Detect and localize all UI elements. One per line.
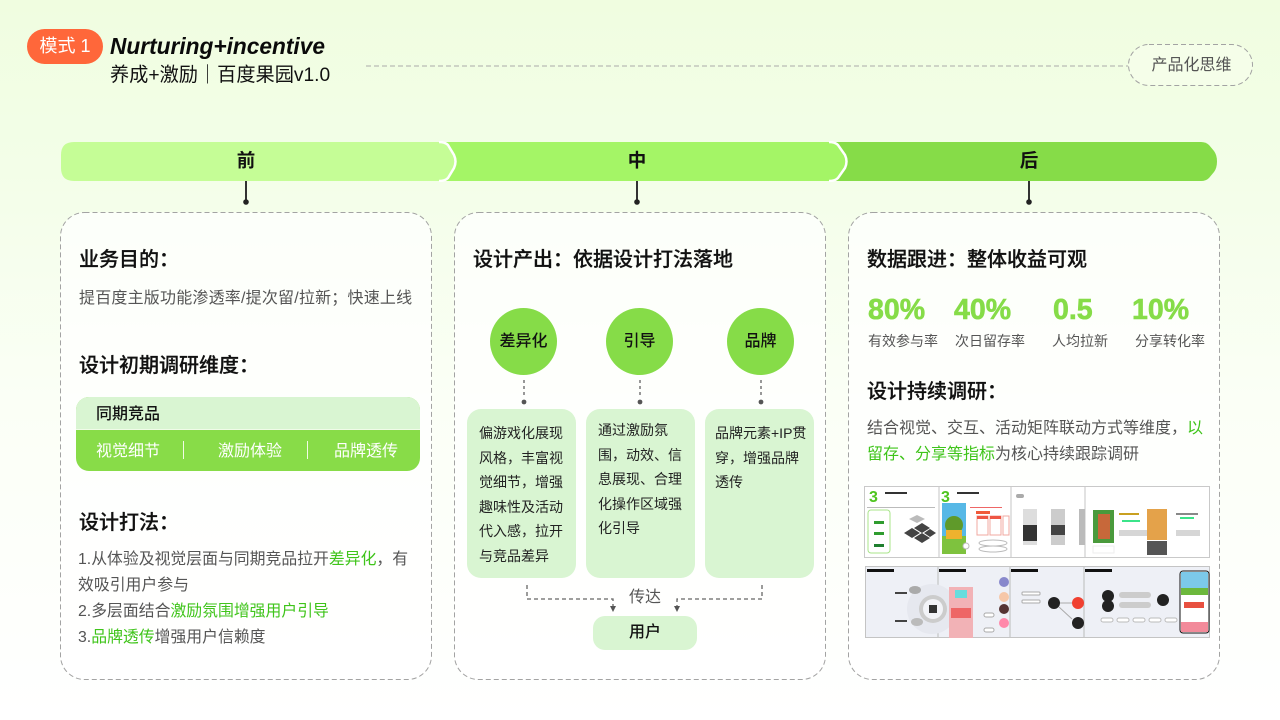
- card: differentiation: 与竞品差异: [479, 548, 549, 564]
- thumbnails: research slides row 1: 3: [941, 489, 950, 506]
- table: competitor dimensions: [76, 397, 420, 471]
- circle: differentiation: 差异化: [499, 333, 548, 350]
- card: brand: 品牌元素+IP贯: [715, 425, 806, 441]
- thumbnails: research slides row 1: [864, 486, 1210, 558]
- card: differentiation: 代入感，拉开: [479, 523, 563, 539]
- card: brand: 穿，增强品牌: [715, 450, 799, 466]
- arrow: after: 后: [1020, 150, 1038, 171]
- stat label: retention: 次日留存率: [955, 333, 1025, 349]
- arrow: before: [61, 142, 456, 181]
- arrow: after: [820, 142, 1217, 181]
- circle: brand: [727, 308, 794, 375]
- panel: after: [848, 212, 1220, 680]
- text: design method list: 3.品牌透传增强用户信赖度: [78, 629, 266, 646]
- table header: [76, 397, 420, 430]
- text: continuous research: 留存、分享等指标为核心持续跟踪调研: [867, 446, 1139, 463]
- card: brand: 透传: [715, 474, 743, 490]
- arrow: during: 中: [628, 150, 646, 171]
- card: differentiation: [467, 409, 576, 578]
- thumbnails: research slides row 2: [865, 566, 1210, 638]
- thumbnails: research slides row 1: 3: [869, 489, 878, 506]
- heading: design method: 设计打法：: [79, 512, 179, 534]
- card: guidance: 化引导: [598, 520, 640, 536]
- table item 2: 激励体验: [218, 443, 282, 460]
- text: continuous research: 结合视觉、交互、活动矩阵联动方式等维度，以: [867, 420, 1203, 437]
- stat label: invites: 人均拉新: [1052, 333, 1108, 349]
- arrow: during: [430, 142, 846, 181]
- title: Nurturing+incentive: [110, 33, 325, 59]
- box: user: [593, 616, 697, 650]
- stat 10%: 10%: [1132, 294, 1189, 326]
- card: differentiation: 趣味性及活动: [479, 498, 563, 514]
- card: differentiation: 风格，丰富视: [479, 450, 563, 466]
- text: continuous research: [867, 419, 1203, 463]
- card: differentiation: 觉细节，增强: [479, 474, 563, 490]
- circle: differentiation: [490, 308, 557, 375]
- card: guidance: 围，动效、信: [598, 446, 682, 462]
- circle: guidance: [606, 308, 673, 375]
- text: design method list: [78, 550, 408, 646]
- text: design method list: 1.从体验及视觉层面与同期竞品拉开差异化，有: [78, 551, 408, 568]
- timeline arrow band: [61, 141, 1217, 182]
- tag: product thinking: [1128, 44, 1253, 86]
- header: [27, 29, 1253, 86]
- label: convey: 传达: [629, 589, 661, 606]
- card: brand: [705, 409, 814, 578]
- card: guidance: 息展现、合理: [598, 471, 682, 487]
- text: business goal: 提百度主版功能渗透率/提次留/拉新；快速上线: [79, 290, 412, 307]
- stat label: participation: 有效参与率: [868, 333, 938, 349]
- heading: data tracking: 数据跟进：整体收益可观: [867, 249, 1087, 271]
- card: guidance: [586, 409, 695, 578]
- panel: before: [60, 212, 432, 680]
- connector: before: [243, 181, 249, 205]
- arrows: cards to user: [526, 585, 763, 612]
- stat 80%: 80%: [868, 294, 925, 326]
- heading: research dimensions: 设计初期调研维度：: [79, 355, 259, 377]
- connector: during: [634, 181, 640, 205]
- text: design method list: 效吸引用户参与: [78, 577, 189, 594]
- panel: during: [454, 212, 826, 680]
- heading: design output: 设计产出：依据设计打法落地: [473, 249, 733, 271]
- stat 40%: 40%: [954, 294, 1011, 326]
- badge: mode 1: [27, 29, 103, 64]
- subtitle: 养成+激励｜百度果园v1.0: [110, 65, 330, 86]
- tag: product thinking: 产品化思维: [1151, 56, 1232, 74]
- heading: business goal: 业务目的：: [79, 249, 179, 271]
- box: user: 用户: [629, 624, 661, 641]
- table item 1: 视觉细节: [96, 443, 160, 460]
- circle: guidance: 引导: [623, 333, 656, 350]
- card: differentiation: 偏游戏化展现: [479, 425, 563, 441]
- arrow: before: 前: [237, 150, 255, 171]
- connectors: circles to cards: [522, 380, 764, 404]
- card: guidance: 化操作区域强: [598, 496, 682, 512]
- heading: continuous research: 设计持续调研：: [867, 381, 1007, 403]
- card: guidance: 通过激励氛: [598, 422, 668, 438]
- table header: 同期竞品: [96, 406, 160, 423]
- circle: brand: 品牌: [744, 333, 776, 350]
- connector: after: [1026, 181, 1032, 205]
- badge: mode 1: 模式 1: [39, 36, 90, 56]
- stat 0.5: 0.5: [1053, 294, 1093, 326]
- table item 3: 品牌透传: [334, 443, 398, 460]
- stat label: share: 分享转化率: [1135, 333, 1205, 349]
- text: design method list: 2.多层面结合激励氛围增强用户引导: [78, 603, 329, 620]
